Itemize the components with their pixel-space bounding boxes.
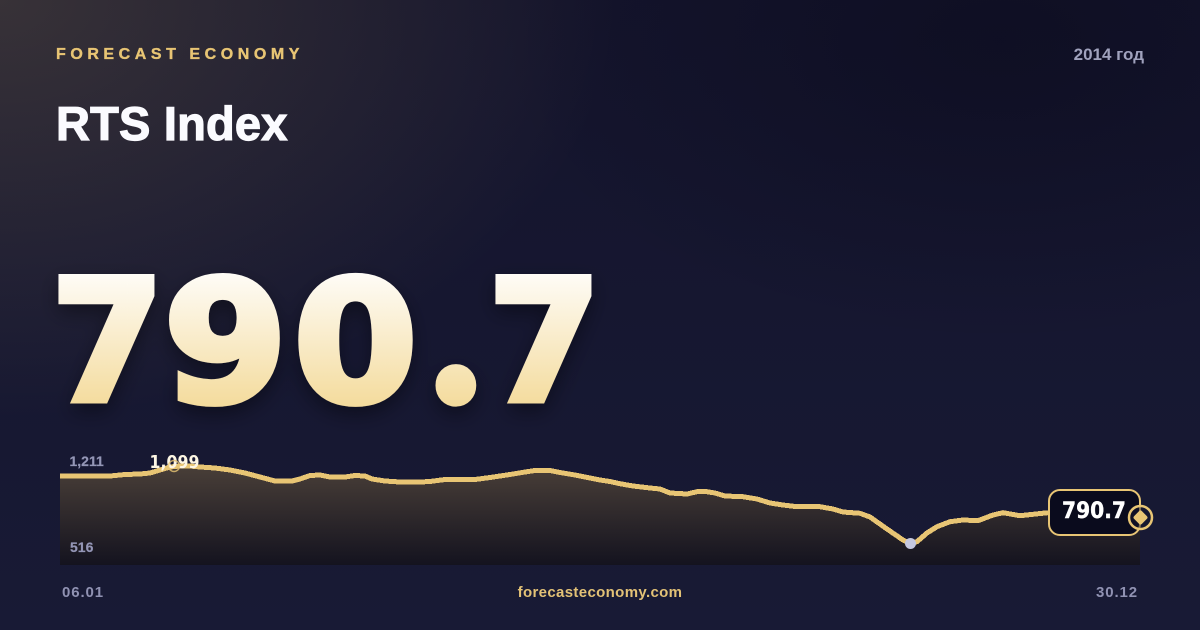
brand label: FORECAST ECONOMY — [56, 46, 304, 63]
current value badge: 790.7 — [1062, 499, 1126, 524]
big value: 7 — [488, 244, 601, 440]
end date: 30.12 — [1096, 584, 1138, 601]
high value label: 1,099 — [150, 452, 200, 473]
price line — [60, 466, 1048, 543]
big value: 0 — [294, 245, 418, 441]
low marker — [905, 538, 916, 549]
area fill — [60, 466, 1140, 565]
current value badge — [1049, 490, 1140, 535]
website: forecasteconomy.com — [518, 584, 682, 601]
current marker — [1129, 506, 1152, 529]
high marker — [168, 460, 180, 472]
big value: . — [425, 181, 487, 456]
title: RTS Index — [56, 97, 288, 150]
sparkline chart — [60, 452, 1152, 565]
axis max label: 1,211 — [70, 453, 104, 469]
big value — [51, 181, 601, 456]
start date: 06.01 — [62, 584, 104, 601]
big value: 7 — [51, 244, 164, 440]
axis min label: 516 — [70, 539, 94, 555]
year label: 2014 год — [1074, 45, 1144, 64]
big value: 9 — [164, 245, 288, 441]
